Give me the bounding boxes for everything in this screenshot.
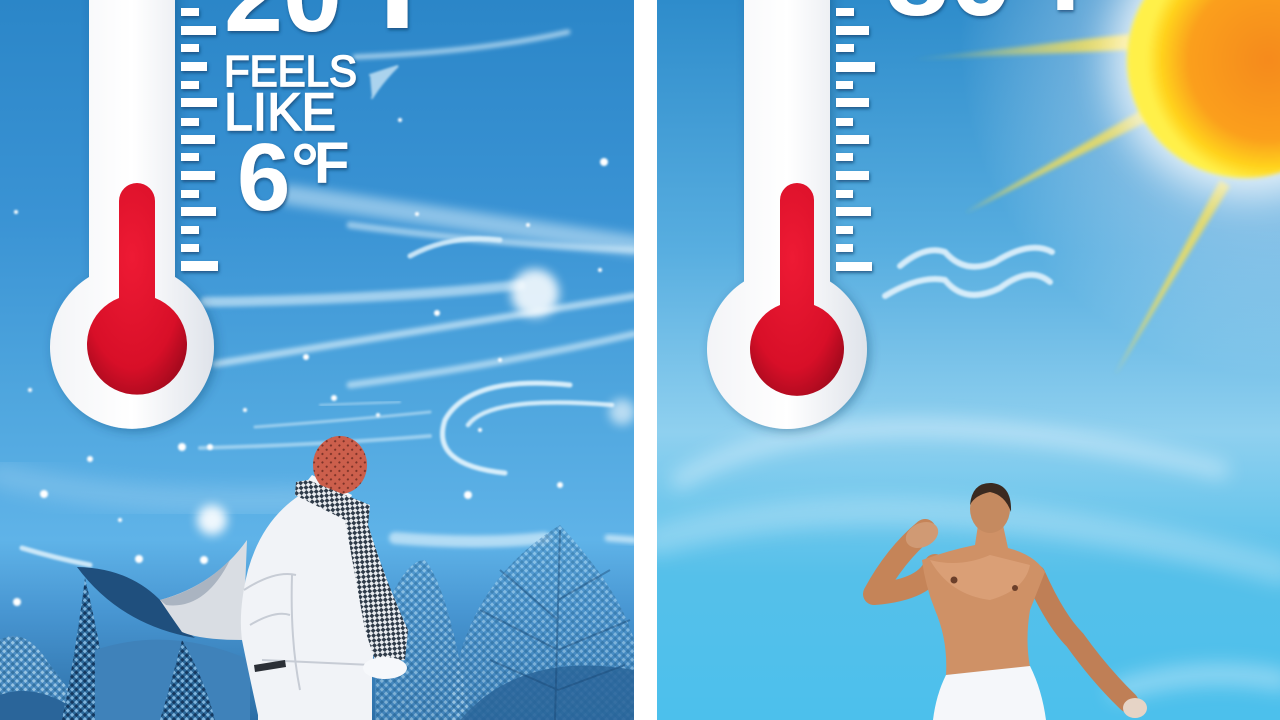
divider [634,0,657,720]
mercury [750,183,844,396]
wristband and hand [254,660,286,672]
scale ticks [836,8,875,271]
thermometer: cold [50,0,218,429]
jacket [241,489,376,720]
hat [313,436,367,494]
mercury [87,183,187,395]
temperature reading: hot [885,0,1117,40]
sky haze arcs [657,427,1280,690]
shorts [933,666,1046,720]
torso [922,525,1045,675]
sun haze [977,0,1280,352]
back arm [874,530,935,594]
scarf [295,480,408,660]
feels like callout: ° [291,129,319,207]
scale ticks [181,8,218,271]
panel: hot side [657,0,1280,720]
cape blowing in the wind [77,540,247,640]
thermometer body [50,0,214,429]
panel: cold side [0,0,635,720]
feels like callout: FEELS [224,47,357,96]
sun [1110,0,1280,195]
person in winter coat [77,436,408,720]
thermometer body [707,0,867,429]
collar [308,475,352,498]
snowflakes [13,118,608,606]
outstretched arm [1035,575,1128,702]
feels like callout: F [314,131,349,196]
feels like callout: LIKE [224,83,336,142]
thermometer: hot [707,0,875,429]
wind gusts [885,248,1052,296]
head [970,492,1010,533]
feels like callout [224,47,357,231]
sun rays [905,34,1230,375]
wind streaks [0,32,634,565]
person in swim shorts [874,483,1147,720]
winter trees [0,525,634,720]
temperature reading: cold [224,0,464,58]
snow bursts [197,269,635,535]
feels like callout: 6 [237,124,290,231]
